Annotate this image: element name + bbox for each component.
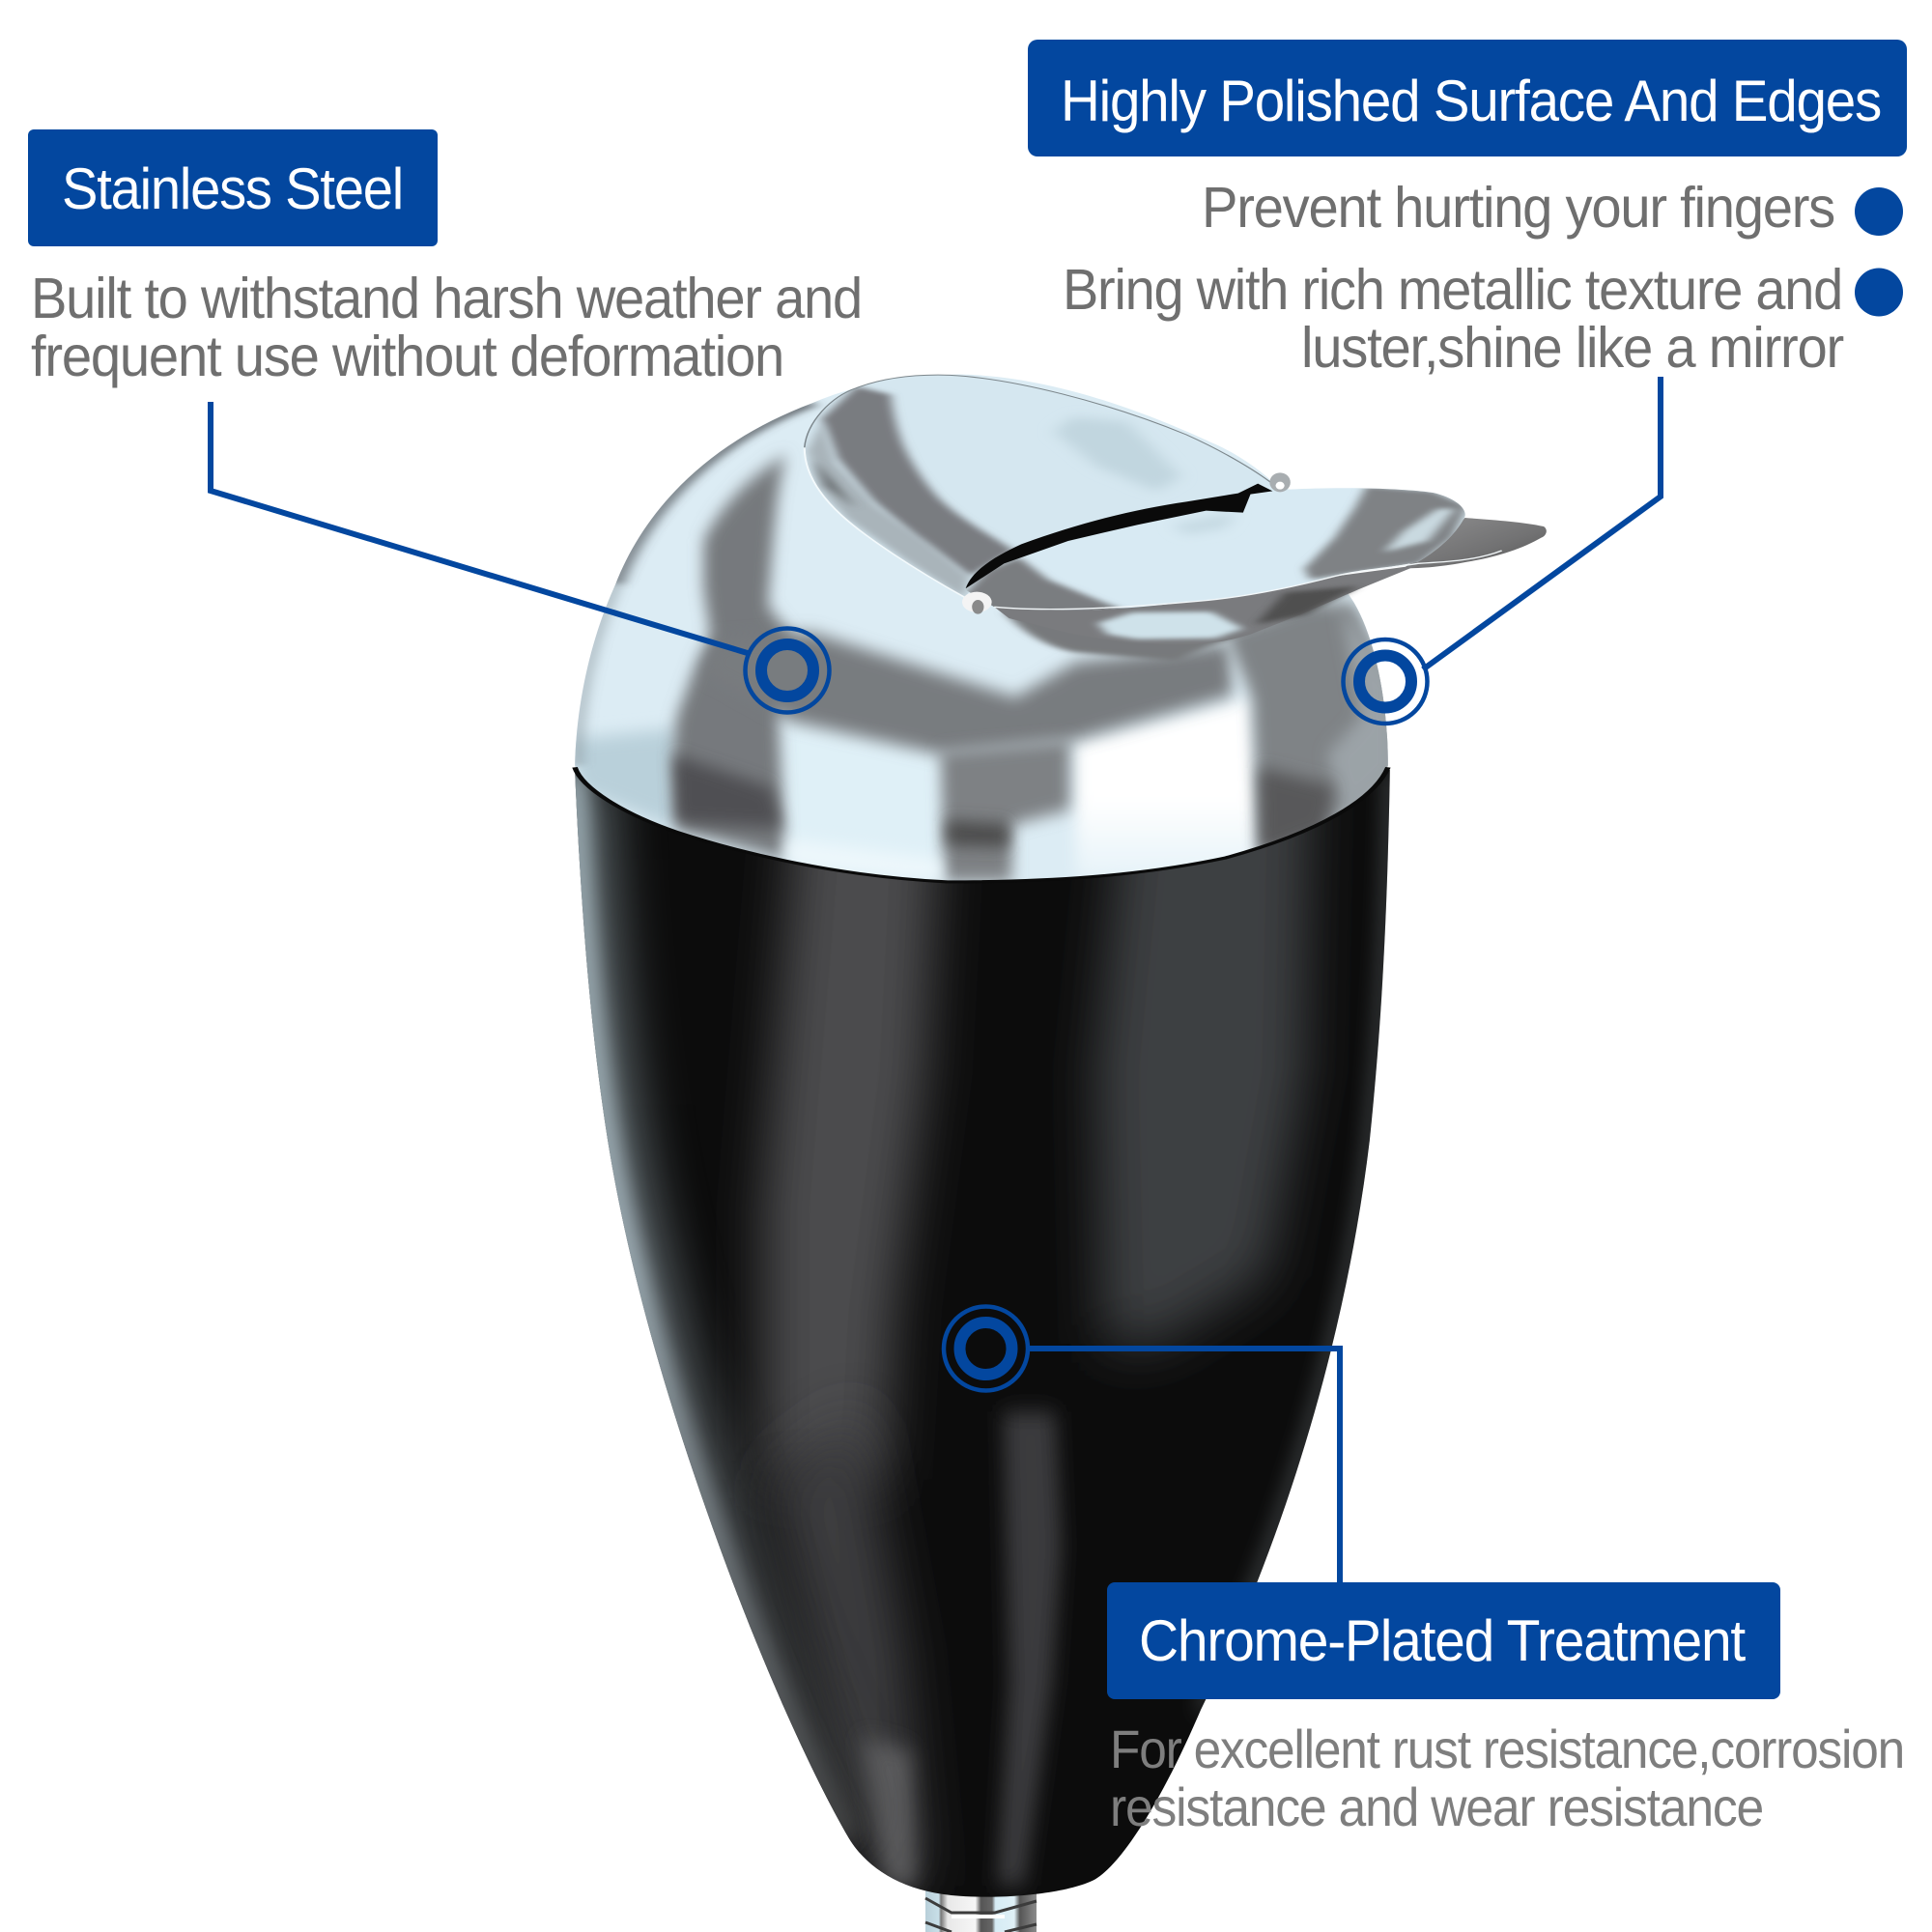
flexible hose [925,1879,1037,1932]
leader line: stainless steel [211,402,751,654]
heading: stainless steel [28,129,438,246]
hinge: left [962,592,992,614]
product: bin [541,348,1547,1932]
text: chrome plated description [1110,1719,1904,1837]
leader line: polished surface [1423,377,1661,669]
marker: chrome plated [944,1306,1028,1391]
heading: chrome plated: Chrome-Plated Treatment [1139,1608,1747,1673]
slit [966,484,1272,588]
marker: stainless steel [746,628,829,713]
marker: polished surface [1343,639,1428,724]
text: stainless steel description: Built to withstand harsh weather and [31,267,862,330]
lower lid flap [959,485,1502,615]
panel: chrome plated [1107,1582,1904,1837]
chrome dome lid [572,375,1391,883]
heading: polished surface [1028,40,1907,156]
bullet text: metallic texture: Bring with rich metallic texture and [1063,258,1842,322]
tail tab [1404,518,1547,568]
leader line: chrome plated [1030,1349,1340,1584]
panel: stainless steel [28,129,862,388]
heading: polished surface: Highly Polished Surface And Edges [1061,69,1881,133]
text: stainless steel description [31,267,862,388]
black body [575,769,1390,1897]
upper bowl disc [805,375,1278,599]
under bowl [994,565,1418,644]
flip flap assembly [805,375,1547,661]
heading: chrome plated [1107,1582,1780,1699]
text: stainless steel description: frequent use without deformation [31,325,783,388]
bullet text: metallic texture: luster,shine like a mirror [1301,316,1844,380]
bullet icon 1 [1855,187,1903,236]
text: chrome plated description: resistance and wear resistance [1110,1776,1763,1837]
bullet text: metallic texture [1063,258,1844,380]
flap shadow [1004,606,1256,661]
panel: polished surface [1028,40,1907,380]
bullet text: prevent hurting: Prevent hurting your fingers [1202,176,1834,240]
bullet icon 2 [1855,269,1903,317]
hinge: right [1269,472,1291,492]
heading: stainless steel: Stainless Steel [62,156,403,221]
